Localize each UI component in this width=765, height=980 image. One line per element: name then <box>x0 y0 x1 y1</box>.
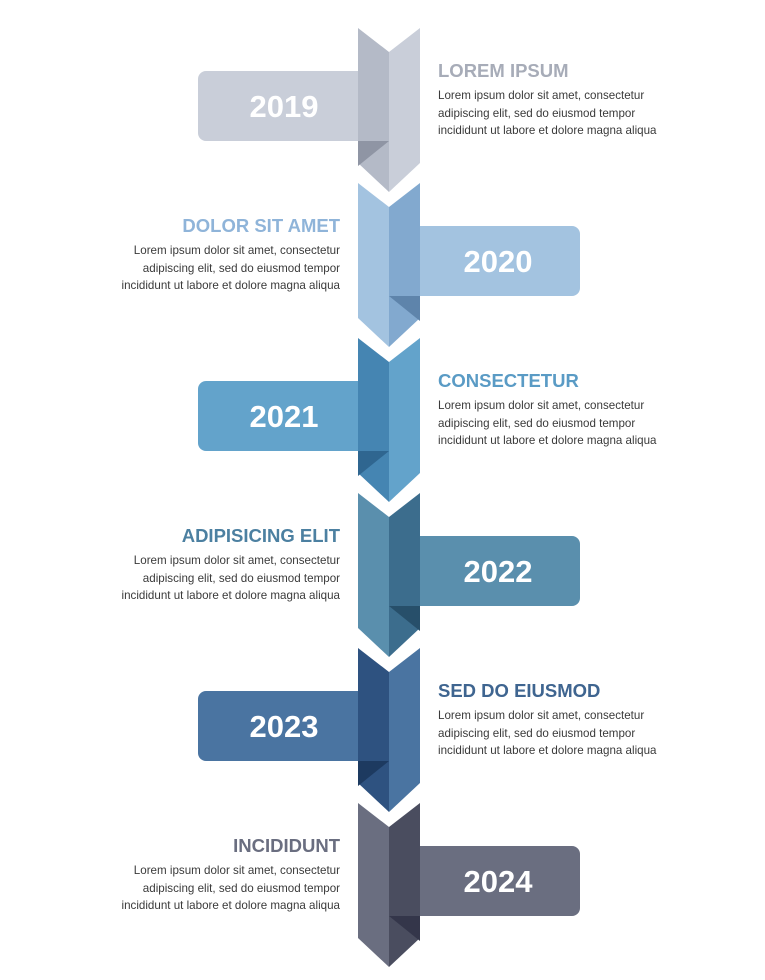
text block: incididunt: Lorem ipsum dolor sit amet, consectetur <box>134 864 340 877</box>
text block: lorem ipsum: incididunt ut labore et dolore magna aliqua <box>438 124 657 137</box>
text block: dolor sit amet: adipiscing elit, sed do eiusmod tempor <box>143 262 340 275</box>
segment: 2019 <box>198 28 420 192</box>
text block: dolor sit amet: Lorem ipsum dolor sit amet, consectetur <box>134 244 340 257</box>
segment: 2022 <box>358 493 580 657</box>
text block: lorem ipsum: adipiscing elit, sed do eiusmod tempor <box>438 107 635 120</box>
text block: incididunt: INCIDIDUNT <box>233 835 341 856</box>
text block: consectetur: CONSECTETUR <box>438 370 579 391</box>
text block: consectetur: adipiscing elit, sed do eiusmod tempor <box>438 417 635 430</box>
tab: 2023 <box>198 691 366 761</box>
text block: sed do eiusmod: incididunt ut labore et dolore magna aliqua <box>438 744 657 757</box>
tab: 2019 <box>198 71 366 141</box>
year: 2024: 2024 <box>464 864 533 899</box>
tab: 2022 <box>412 536 580 606</box>
text block: adipisicing elit: ADIPISICING ELIT <box>182 525 341 546</box>
text block: sed do eiusmod: Lorem ipsum dolor sit amet, consectetur <box>438 709 644 722</box>
text block: sed do eiusmod: adipiscing elit, sed do eiusmod tempor <box>438 727 635 740</box>
text block: adipisicing elit <box>122 525 341 602</box>
segment: 2021 <box>198 338 420 502</box>
segment: 2020 <box>358 183 580 347</box>
text block: adipisicing elit: adipiscing elit, sed do eiusmod tempor <box>143 572 340 585</box>
year: 2022: 2022 <box>464 554 532 589</box>
text block: sed do eiusmod: SED DO EIUSMOD <box>438 680 600 701</box>
tab: 2020 <box>412 226 580 296</box>
text block: dolor sit amet: incididunt ut labore et dolore magna aliqua <box>122 279 341 292</box>
text block: incididunt: incididunt ut labore et dolore magna aliqua <box>122 899 341 912</box>
year: 2020: 2020 <box>464 244 532 279</box>
tab: 2021 <box>198 381 366 451</box>
text block: lorem ipsum: LOREM IPSUM <box>438 60 569 81</box>
text block: adipisicing elit: incididunt ut labore et dolore magna aliqua <box>122 589 341 602</box>
text block: consectetur: incididunt ut labore et dolore magna aliqua <box>438 434 657 447</box>
segment: 2023 <box>198 648 420 812</box>
text block: incididunt <box>122 835 341 912</box>
tab: 2024 <box>412 846 580 916</box>
text block: consectetur: Lorem ipsum dolor sit amet, consectetur <box>438 399 644 412</box>
text block: dolor sit amet: DOLOR SIT AMET <box>182 215 341 236</box>
text block: lorem ipsum: Lorem ipsum dolor sit amet, consectetur <box>438 89 644 102</box>
text block: lorem ipsum <box>438 60 657 137</box>
year: 2019: 2019 <box>250 89 318 124</box>
segment: 2024 <box>358 803 580 967</box>
text block: dolor sit amet <box>122 215 341 292</box>
text block: consectetur <box>438 370 657 447</box>
text block: adipisicing elit: Lorem ipsum dolor sit amet, consectetur <box>134 554 340 567</box>
text block: sed do eiusmod <box>438 680 657 757</box>
text block: incididunt: adipiscing elit, sed do eiusmod tempor <box>143 882 340 895</box>
year: 2021: 2021 <box>250 399 318 434</box>
year: 2023: 2023 <box>250 709 318 744</box>
